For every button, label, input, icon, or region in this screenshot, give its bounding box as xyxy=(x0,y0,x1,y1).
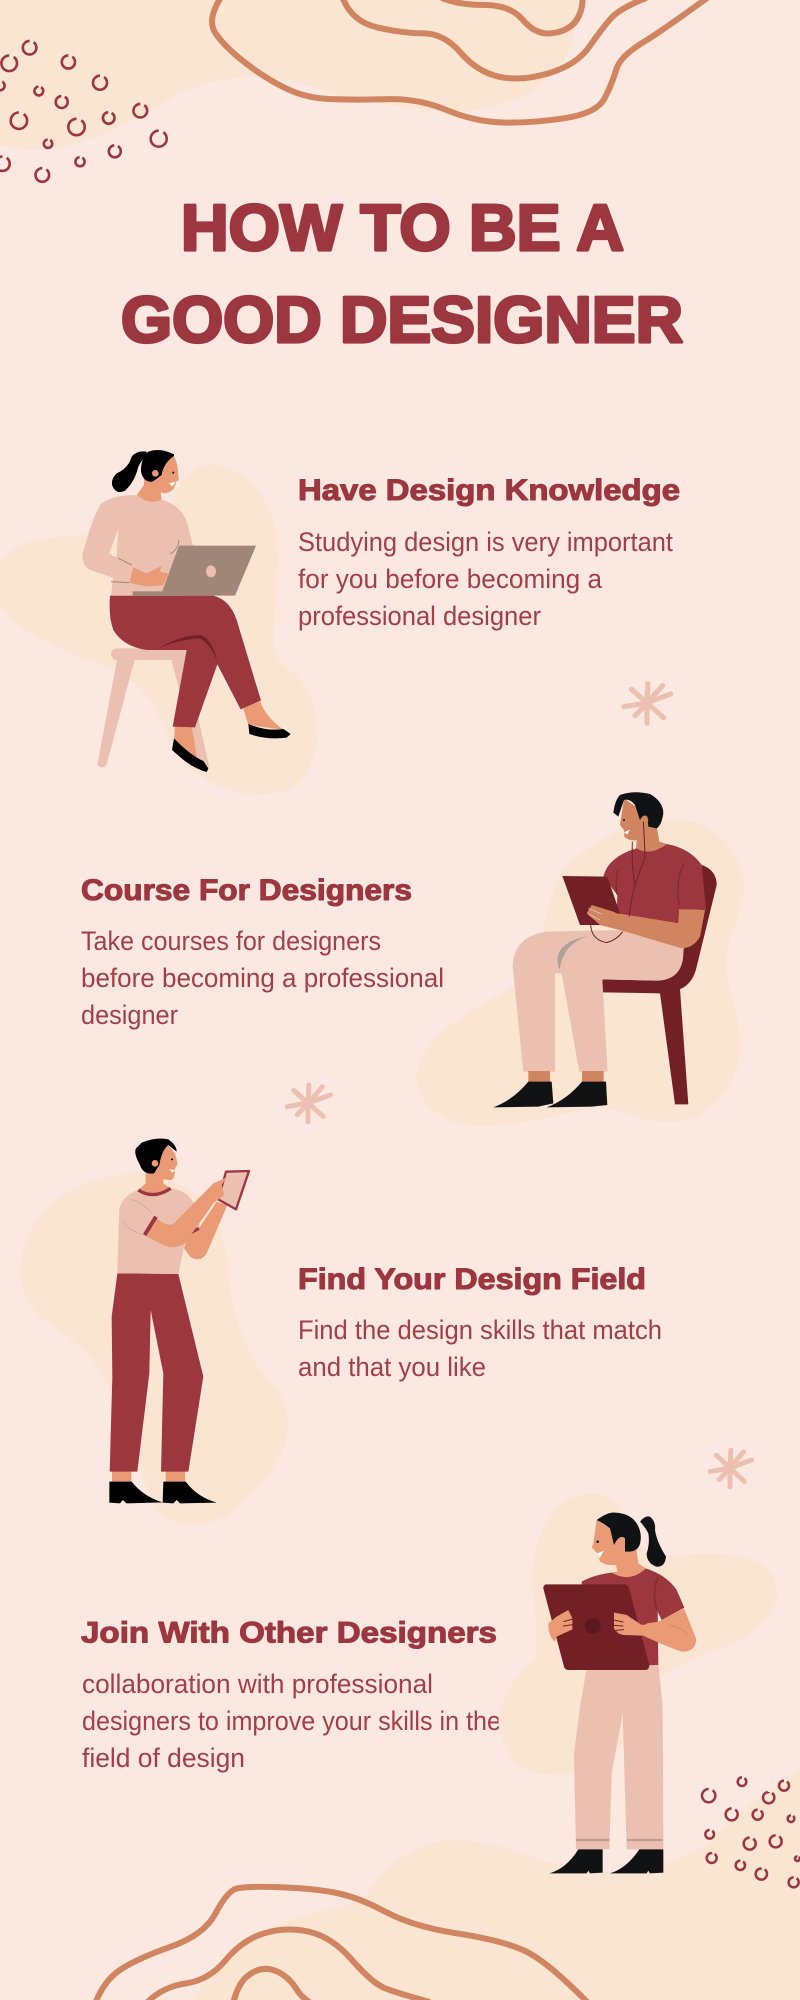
text block: join with other designers: collaboration with professional xyxy=(82,1669,433,1699)
hands xyxy=(548,1610,653,1642)
tablet xyxy=(218,1171,249,1209)
front arm xyxy=(147,1177,227,1247)
text block: find your design field: Find the design skills that match xyxy=(298,1315,662,1345)
blob behind man xyxy=(20,1173,288,1524)
text block: course for designers: designer xyxy=(81,1000,178,1030)
title: HOW TO BE A xyxy=(181,191,624,264)
title: GOOD DESIGNER xyxy=(121,283,683,356)
hair and ponytail xyxy=(596,1513,666,1567)
illustration: man standing with tablet xyxy=(20,1139,288,1524)
text block: have design knowledge xyxy=(298,527,674,631)
top decoration: blob and contour lines xyxy=(0,0,707,150)
title xyxy=(121,191,683,356)
heading: find your design field: Find Your Design Field xyxy=(298,1263,646,1296)
text block: have design knowledge: professional designer xyxy=(298,601,541,631)
sweater xyxy=(111,495,193,596)
text block: course for designers: before becoming a professional xyxy=(81,963,444,993)
icon: asterisk 3 xyxy=(710,1450,752,1487)
back arm xyxy=(184,1202,227,1259)
shirt xyxy=(603,844,706,923)
text block: join with other designers xyxy=(82,1669,501,1773)
shirt xyxy=(582,1568,684,1667)
hair xyxy=(141,450,174,482)
text block: join with other designers: designers to improve your skills in the xyxy=(82,1706,501,1736)
hair xyxy=(613,792,663,828)
chair xyxy=(602,865,717,1104)
head and neck xyxy=(620,798,667,852)
bottom decoration: blob and contour lines xyxy=(96,1770,800,2000)
neck and head xyxy=(138,1143,178,1195)
socks and shoes xyxy=(493,1071,607,1107)
text block: course for designers: Take courses for designers xyxy=(81,926,381,956)
dots: top left ring cluster xyxy=(0,41,167,182)
text block: find your design field xyxy=(298,1315,662,1382)
text block: have design knowledge: Studying design is very important xyxy=(298,527,674,557)
trousers xyxy=(574,1665,663,1849)
head and neck xyxy=(592,1520,646,1577)
text block: join with other designers: field of design xyxy=(82,1743,245,1773)
trousers xyxy=(513,930,683,1072)
illustration: man seated with tablet xyxy=(416,792,745,1126)
hair xyxy=(135,1139,177,1174)
stool xyxy=(97,648,209,767)
illustration: woman standing holding laptop xyxy=(498,1493,777,1873)
feet and shoes xyxy=(172,702,291,772)
socks and shoes xyxy=(109,1470,217,1503)
tablet xyxy=(562,876,620,925)
dots: bottom right ring cluster xyxy=(702,1777,800,1887)
hand xyxy=(129,566,168,587)
blob behind woman xyxy=(498,1493,777,1775)
illustration: woman with laptop on stool xyxy=(0,450,318,794)
laptop xyxy=(543,1584,649,1670)
trousers xyxy=(110,596,261,727)
heading: have design knowledge: Have Design Knowledge xyxy=(298,474,680,507)
heading: join with other designers: Join With Other Designers xyxy=(81,1616,497,1650)
boots xyxy=(549,1849,663,1873)
t-shirt xyxy=(117,1188,200,1274)
laptop xyxy=(133,546,256,596)
text block: find your design field: and that you like xyxy=(298,1352,486,1382)
trousers xyxy=(110,1273,203,1472)
heading: course for designers: Course For Designers xyxy=(81,874,412,907)
arm xyxy=(642,1608,696,1652)
arm and hand xyxy=(587,905,705,948)
earphone wire xyxy=(591,822,645,943)
text block: course for designers xyxy=(81,926,444,1030)
blob behind woman xyxy=(0,464,318,794)
text block: have design knowledge: for you before becoming a xyxy=(298,564,602,594)
blob behind man xyxy=(416,821,745,1126)
icon: asterisk 1 xyxy=(624,684,671,723)
icon: asterisk 2 xyxy=(287,1085,330,1122)
head and neck xyxy=(137,455,179,502)
